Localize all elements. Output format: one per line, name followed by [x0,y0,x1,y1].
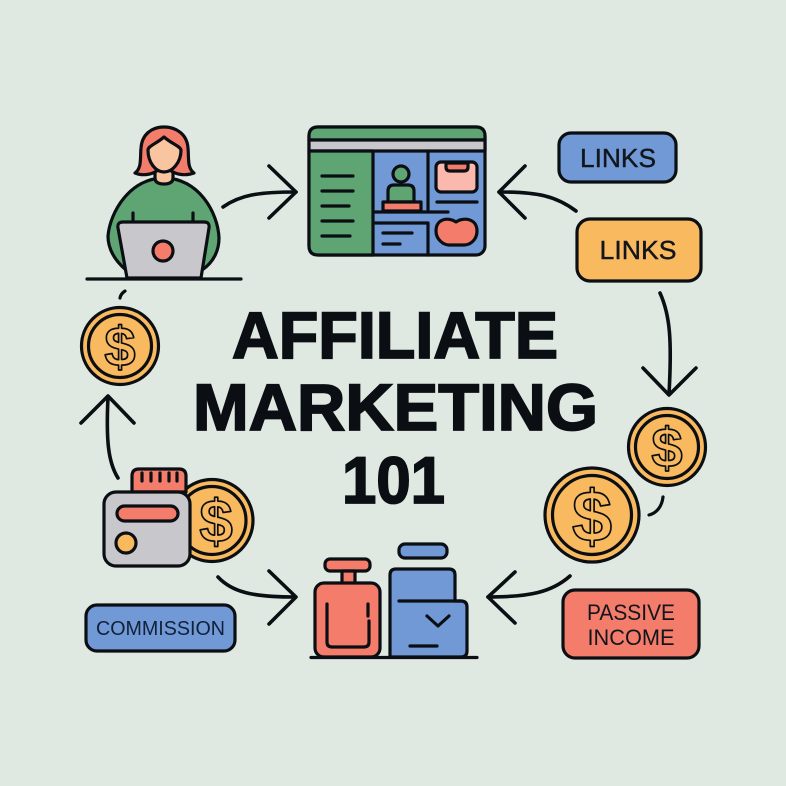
label: commission [86,605,235,651]
label: links blue [559,133,676,182]
icon: coin left: $ [104,315,136,378]
title: AFFILIATE [232,298,558,372]
icon: coin behind wallet [171,480,253,562]
arc above left coin [120,291,125,298]
arrow: wallet to coin [81,396,134,478]
title: MARKETING [193,370,598,444]
icon: coin behind wallet: $ [199,488,233,555]
arrow: person to website [223,166,296,218]
label: passive income: INCOME [588,625,674,650]
title [193,298,598,517]
label: links blue: LINKS [580,143,656,173]
arrow: links to website [499,166,576,218]
label: links orange: LINKS [600,235,676,265]
icon: coin left [82,308,158,384]
icon: large coin right [545,468,639,562]
icon: product packages [311,544,477,658]
icon: small coin right: $ [651,416,683,479]
arrow: links to coins [643,293,696,395]
arc between coins [649,497,663,515]
label: passive income [563,590,699,658]
arrow: coins to products [488,572,570,623]
icon: large coin right: $ [572,477,612,557]
label: passive income: PASSIVE [587,600,675,625]
arrow: commission to products [218,571,296,624]
label: links orange [577,219,701,281]
icon: person at laptop [87,127,241,279]
icon: small coin right [628,408,706,486]
label: commission: COMMISSION [96,617,225,640]
icon: wallet [104,469,190,566]
icon: website mockup [309,127,485,255]
title: 101 [342,443,445,517]
